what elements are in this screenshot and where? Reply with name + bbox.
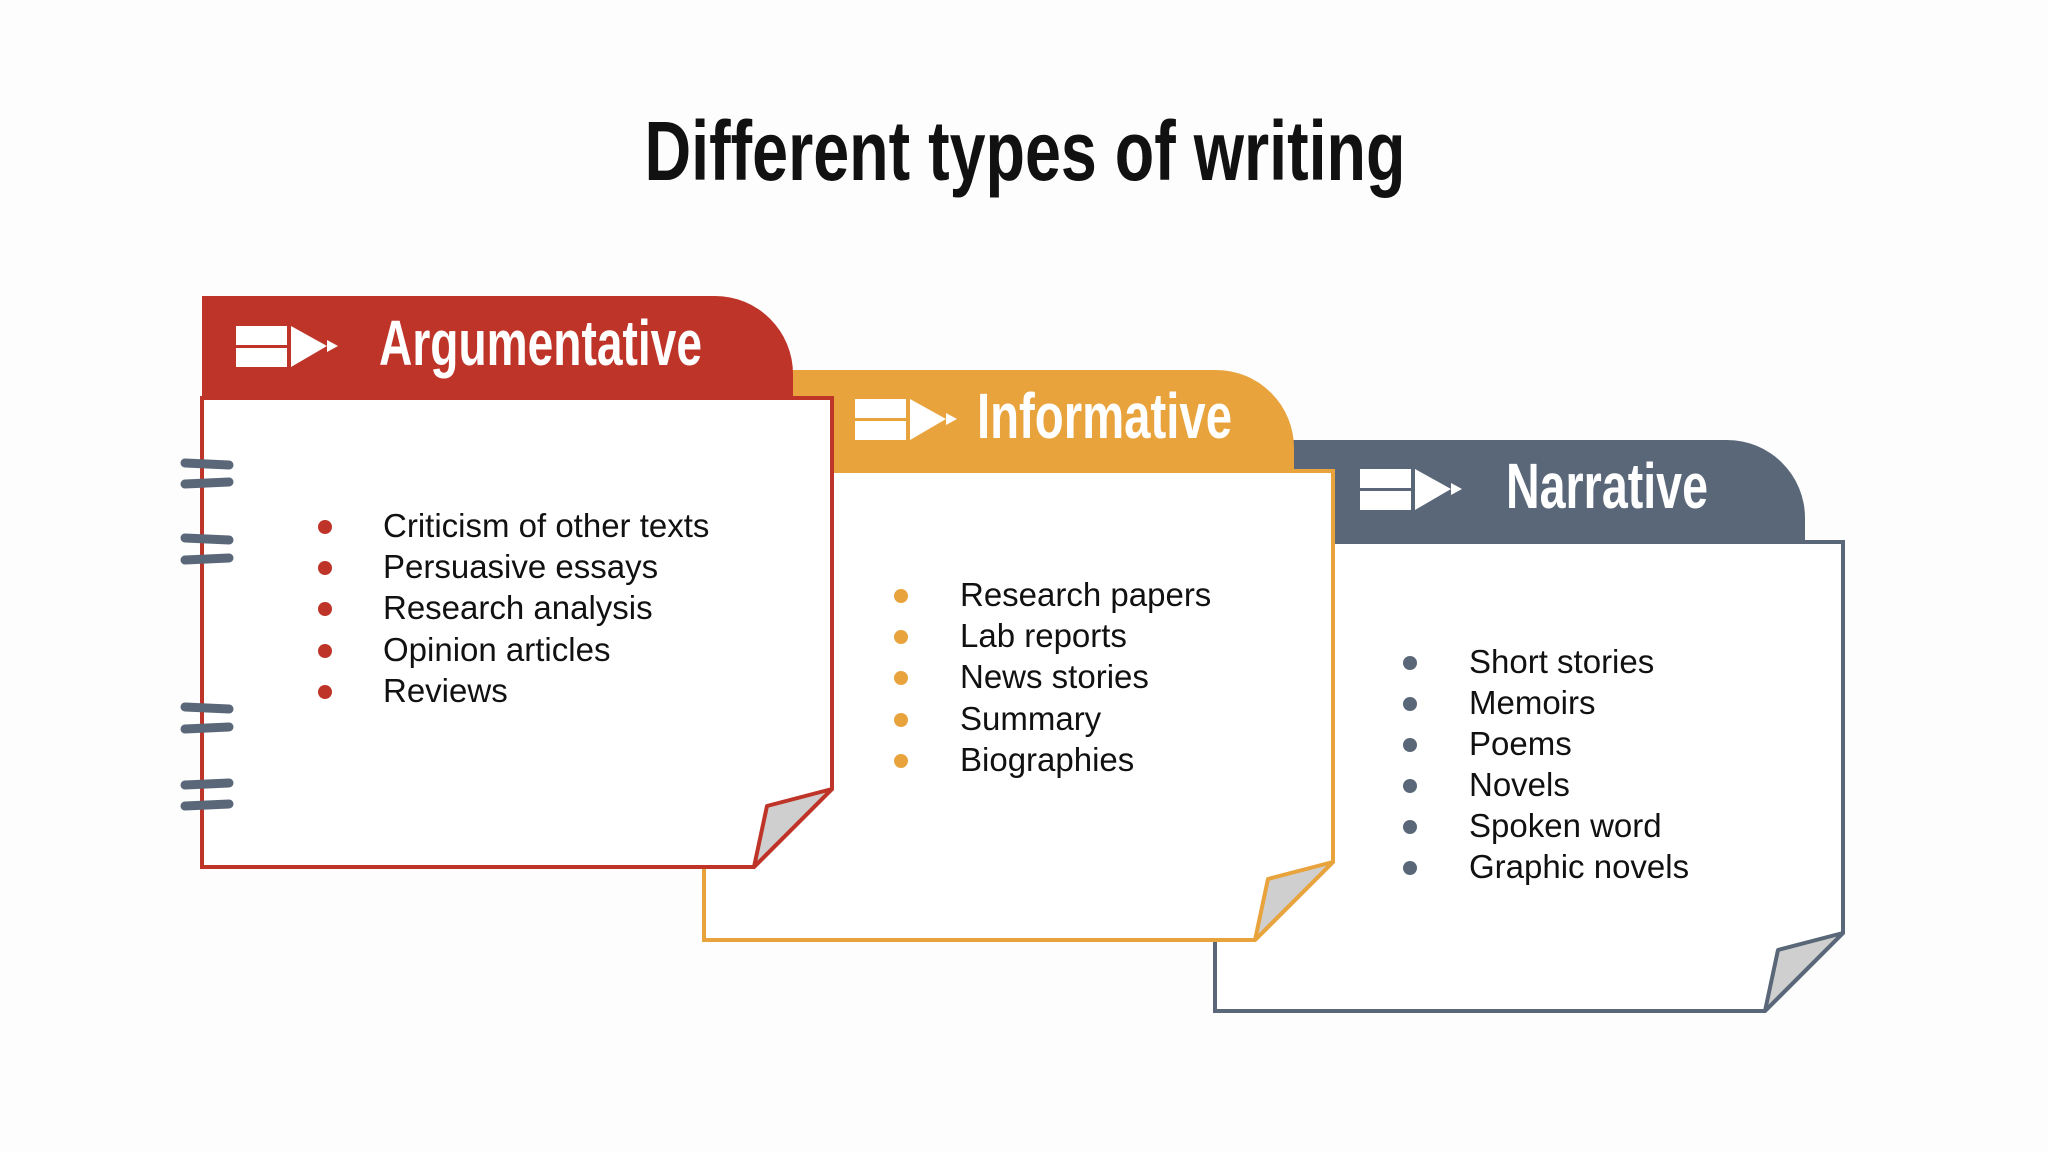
list: narrative (1403, 643, 1689, 885)
heading: informative: Informative (977, 380, 1232, 452)
card: argumentative (185, 296, 832, 867)
list: argumentative: Reviews (383, 672, 508, 709)
list: informative: News stories (960, 658, 1149, 695)
tab: informative (704, 370, 1294, 471)
paper: argumentative (202, 398, 832, 867)
list: narrative: Graphic novels (1469, 848, 1689, 885)
list: narrative: Poems (1469, 725, 1572, 762)
list: informative (894, 576, 1211, 778)
icon: pencil (236, 326, 338, 367)
list: narrative: Spoken word (1469, 807, 1662, 844)
icon: pencil (1360, 469, 1462, 510)
tab: argumentative (202, 296, 793, 398)
title: Different types of writing (644, 104, 1406, 198)
spiral rings (185, 463, 229, 806)
list: narrative: Short stories (1469, 643, 1654, 680)
list: narrative: Memoirs (1469, 684, 1596, 721)
list: argumentative: Criticism of other texts (383, 507, 709, 544)
list: argumentative: Opinion articles (383, 631, 610, 668)
paper: narrative (1215, 542, 1843, 1011)
list: informative: Summary (960, 700, 1102, 737)
heading: narrative: Narrative (1506, 450, 1708, 522)
list: informative: Biographies (960, 741, 1134, 778)
card: narrative (1215, 440, 1843, 1011)
list: argumentative: Persuasive essays (383, 548, 658, 585)
list: argumentative: Research analysis (383, 589, 653, 626)
list: argumentative (318, 507, 709, 709)
card: informative (704, 370, 1333, 940)
list: informative: Research papers (960, 576, 1211, 613)
tab: narrative (1215, 440, 1805, 542)
paper: informative (704, 471, 1333, 940)
list: informative: Lab reports (960, 617, 1127, 654)
heading: argumentative: Argumentative (379, 307, 702, 379)
icon: pencil (855, 399, 957, 440)
list: narrative: Novels (1469, 766, 1570, 803)
